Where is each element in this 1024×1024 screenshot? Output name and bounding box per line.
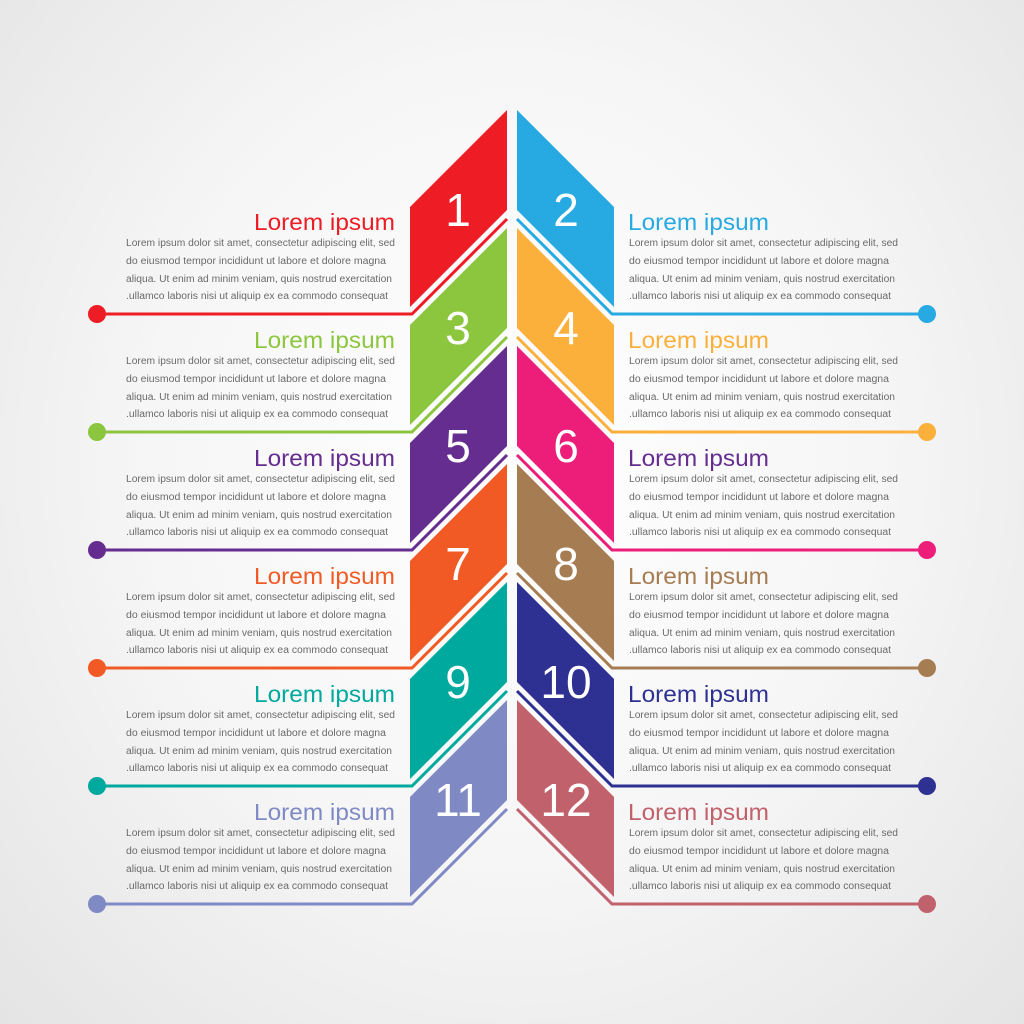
- step 1: 1: [445, 184, 471, 236]
- step 7: 7: [445, 538, 471, 590]
- step 11: [88, 700, 507, 913]
- step 10: 10: [540, 656, 592, 708]
- step 8: Lorem ipsum: [628, 563, 769, 589]
- step 4: Lorem ipsum: [628, 327, 769, 353]
- step 3: [88, 228, 507, 441]
- step 1: Lorem ipsum: [254, 209, 395, 235]
- step 12: Lorem ipsum: [628, 799, 769, 825]
- step 6: 6: [553, 420, 579, 472]
- step 6: [517, 346, 936, 559]
- step 9: Lorem ipsum: [254, 681, 395, 707]
- step 1: [88, 110, 507, 323]
- step 8: [517, 464, 936, 677]
- step 11: Lorem ipsum: [254, 799, 395, 825]
- step 2: 2: [553, 184, 579, 236]
- step 7: Lorem ipsum: [254, 563, 395, 589]
- step 10: [517, 582, 936, 795]
- step 5: 5: [445, 420, 471, 472]
- step 6: Lorem ipsum: [628, 445, 769, 471]
- step 12: [517, 700, 936, 913]
- step 12: 12: [540, 774, 592, 826]
- step 3: 3: [445, 302, 471, 354]
- step 4: [517, 228, 936, 441]
- step 5: Lorem ipsum: [254, 445, 395, 471]
- step 10: Lorem ipsum: [628, 681, 769, 707]
- step 4: 4: [553, 302, 579, 354]
- step 3: Lorem ipsum: [254, 327, 395, 353]
- step 9: [88, 582, 507, 795]
- step 2: [517, 110, 936, 323]
- step 5: [88, 346, 507, 559]
- step 2: Lorem ipsum: [628, 209, 769, 235]
- step 11: 11: [434, 774, 482, 826]
- step 7: [88, 464, 507, 677]
- step 8: 8: [553, 538, 579, 590]
- step 9: 9: [445, 656, 471, 708]
